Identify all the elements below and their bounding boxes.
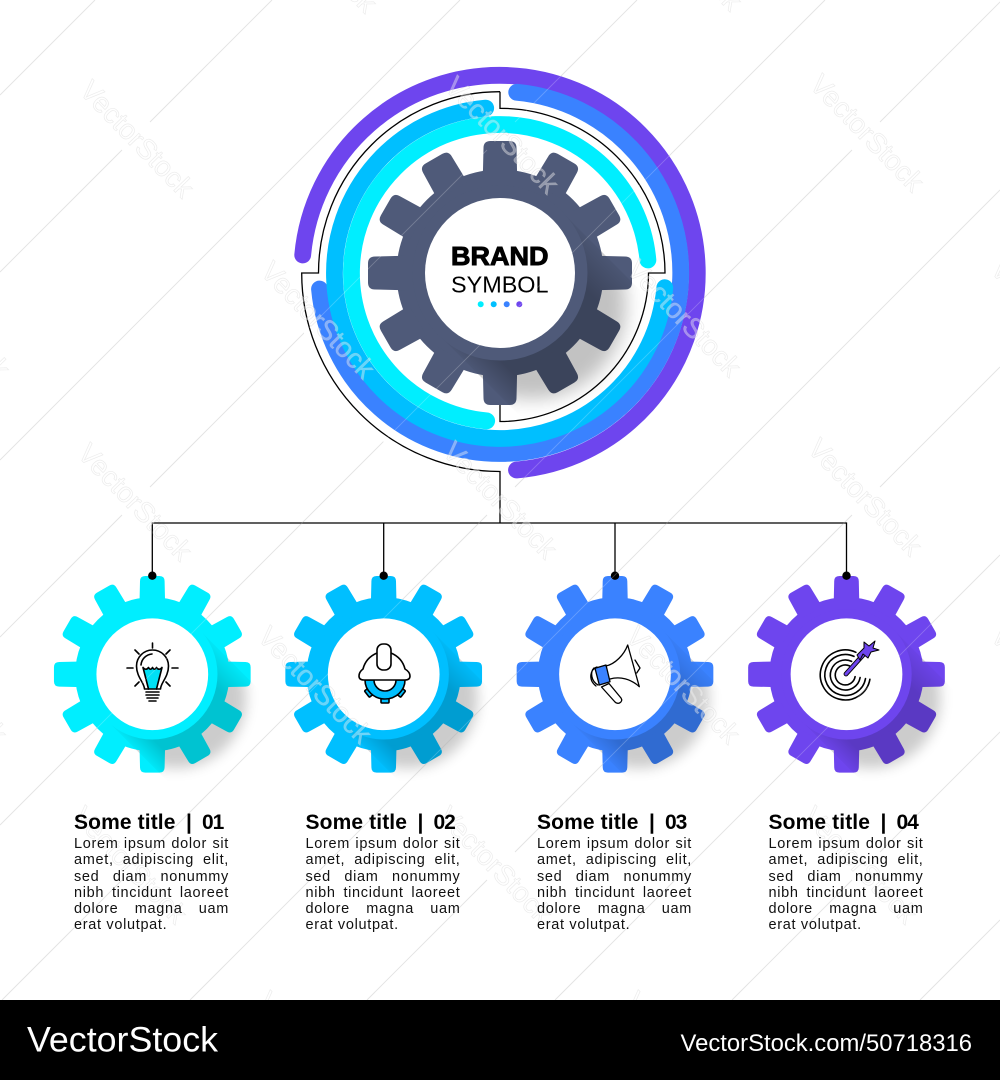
- text block: item 02: amet, adipiscing elit,: [306, 852, 460, 868]
- watermark text: VectorStock: [437, 435, 564, 565]
- panel: gear 2 light blue: [285, 576, 533, 823]
- text block: item 01: nibh tincidunt laoreet: [74, 885, 229, 901]
- icon: light bulb: [127, 643, 178, 701]
- watermark text: VectorStock: [252, 620, 379, 750]
- text block: item 04: Lorem ipsum dolor sit: [768, 836, 924, 852]
- four colour dots: [478, 301, 522, 307]
- ring: blue arc: [320, 92, 681, 454]
- panel: gear 4 purple: [748, 576, 996, 823]
- text block: item 01: sed diam nonummy: [74, 868, 229, 884]
- icon: hard hat with gear: [359, 644, 410, 703]
- watermark text: VectorStock: [804, 68, 931, 198]
- text block: item 01: Some title: [74, 811, 176, 834]
- ring: light blue arc: [334, 108, 665, 438]
- text block: item 04: |: [880, 811, 886, 834]
- icon: megaphone: [591, 645, 640, 703]
- text block: item 02: [306, 811, 460, 933]
- text block: item 01: |: [186, 811, 192, 834]
- text block: item 02: sed diam nonummy: [306, 868, 460, 884]
- outline: right black line: [500, 92, 665, 421]
- text block: item 02: Some title: [306, 811, 407, 834]
- text block: item 04: dolore magna uam: [768, 901, 924, 917]
- text block: item 03: |: [649, 811, 655, 834]
- text block: item 04: amet, adipiscing elit,: [768, 852, 924, 868]
- panel: gear 3 blue: [517, 576, 764, 823]
- text block: item 01: 01: [202, 811, 223, 834]
- icon: target with arrow: [820, 641, 879, 700]
- text block: item 04: [768, 811, 924, 933]
- watermark text: VectorStock: [74, 74, 201, 204]
- text block: item 02: Lorem ipsum dolor sit: [306, 836, 460, 852]
- text block: item 01: dolore magna uam: [74, 901, 229, 917]
- footer band: VectorStock.com/50718316: [680, 1030, 972, 1057]
- text block: item 02: dolore magna uam: [306, 901, 460, 917]
- watermark text: VectorStock: [621, 253, 748, 383]
- text block: item 01: amet, adipiscing elit,: [74, 852, 229, 868]
- text block: item 02: |: [418, 811, 423, 834]
- brand text: [451, 243, 548, 297]
- watermark text: VectorStock: [802, 432, 929, 562]
- text block: item 03: 03: [665, 811, 686, 834]
- text block: item 03: Some title: [537, 811, 639, 834]
- text block: item 01: Lorem ipsum dolor sit: [74, 836, 229, 852]
- text block: item 03: erat volutpat.: [537, 917, 630, 933]
- watermark text: VectorStock: [439, 70, 566, 200]
- text block: item 02: nibh tincidunt laoreet: [306, 885, 460, 901]
- text block: item 02: 02: [434, 811, 455, 834]
- panel: central brand emblem: [303, 75, 700, 473]
- text block: item 01: [74, 811, 229, 933]
- text block: item 02: erat volutpat.: [306, 917, 399, 933]
- watermark text: VectorStock: [620, 620, 747, 750]
- watermark text: VectorStock: [432, 800, 559, 930]
- watermark text: VectorStock: [72, 437, 199, 567]
- connector tree: [152, 92, 847, 575]
- ring: cyan arc: [351, 124, 648, 421]
- text block: item 04: Some title: [768, 811, 870, 834]
- panel: gear 1 cyan: [54, 576, 301, 823]
- text block: item 03: [537, 811, 692, 933]
- watermark text: VectorStock: [255, 255, 382, 385]
- connector end dots: [148, 572, 851, 580]
- text block: item 03: dolore magna uam: [537, 901, 692, 917]
- text block: item 01: erat volutpat.: [74, 917, 167, 933]
- text block: item 04: nibh tincidunt laoreet: [768, 885, 924, 901]
- text block: item 04: sed diam nonummy: [768, 868, 924, 884]
- ring: purple outer arc: [303, 75, 697, 470]
- footer band: [0, 1000, 1000, 1080]
- brand text: SYMBOL: [451, 271, 548, 297]
- text block: item 03: nibh tincidunt laoreet: [537, 885, 692, 901]
- footer band: VectorStock: [27, 1021, 219, 1060]
- watermark text: VectorStock: [797, 800, 924, 930]
- text block: item 03: Lorem ipsum dolor sit: [537, 836, 692, 852]
- text block: item 03: sed diam nonummy: [537, 868, 692, 884]
- brand text: BRAND: [451, 243, 548, 271]
- text block: item 04: 04: [896, 811, 918, 834]
- text block: item 03: amet, adipiscing elit,: [537, 852, 692, 868]
- white disc behind central gear: [295, 68, 705, 478]
- text block: item 04: erat volutpat.: [768, 917, 862, 933]
- central dark gear: [368, 141, 700, 473]
- watermark text: VectorStock: [67, 800, 194, 930]
